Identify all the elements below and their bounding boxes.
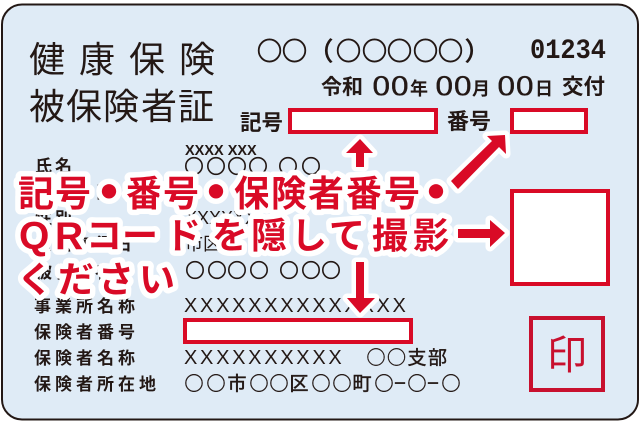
- branch name: ○○支部: [366, 343, 447, 370]
- name romaji: XXXX XXX: [185, 143, 257, 159]
- label: name: 氏名: [35, 157, 75, 176]
- issue date: 00: [372, 67, 409, 103]
- issue date: 交付: [562, 70, 605, 101]
- seal stamp: [531, 318, 603, 390]
- label: symbol: 記号: [240, 106, 283, 137]
- seal stamp: 印: [547, 323, 587, 381]
- label: birth date: 生年月日: [35, 182, 115, 202]
- insurer name value: XXXXXXXXXX: [184, 347, 344, 369]
- label: insurer number: 保険者番号: [34, 323, 139, 342]
- message line 2 QR letters: QR: [19, 215, 83, 258]
- red box: symbol: [290, 110, 436, 132]
- arrow: right to QR box: [458, 220, 505, 247]
- arrow: diagonal to number box: [451, 135, 506, 189]
- message line 2: コードを隠して撮影: [86, 207, 449, 259]
- message line 1 text: 記号番号保険者番号: [18, 165, 420, 217]
- red box: QR code: [512, 191, 608, 284]
- issue date: [321, 67, 605, 103]
- label: sex: 性別: [35, 209, 75, 228]
- red box: insurer number: [185, 320, 411, 342]
- office value: XXXXXXXXXXXXXX: [184, 295, 409, 317]
- red box: number: [512, 110, 586, 132]
- address dashes: －－: [394, 373, 440, 392]
- label: acquisition date: 資格取得日: [35, 235, 135, 254]
- acquisition value: 市区町: [185, 234, 239, 254]
- address value: ○○市○○区○○町○○○: [184, 369, 461, 396]
- label: insurer address: 保険者所在地: [34, 375, 160, 394]
- warning message: [17, 149, 464, 303]
- label: number: 番号: [447, 104, 491, 136]
- title: insured person card: 被保険者証: [29, 86, 214, 127]
- arrow: down to insurer number box: [347, 262, 375, 313]
- label: insurer name: 保険者名称: [34, 349, 139, 368]
- birth date value: ○○: [183, 178, 222, 204]
- card number: 01234: [530, 36, 606, 67]
- insurer name placeholder: ○○（○○○○○）: [257, 32, 490, 68]
- label: office name: 事業所名称: [34, 297, 139, 316]
- issue date: 令和: [321, 71, 363, 101]
- issue date: 年: [410, 75, 428, 101]
- issue date: 日: [535, 75, 553, 101]
- issue date: 00: [497, 67, 534, 103]
- message line 3: ください: [17, 251, 175, 303]
- sex value: XXXXXX: [185, 208, 257, 228]
- guardian value: ○○○○○○○: [186, 256, 341, 283]
- arrow: up to symbol box: [346, 139, 373, 167]
- title: health insurance: 健康保険: [29, 39, 215, 80]
- name value: ○○○○○○: [184, 152, 321, 179]
- message line 1 dots: ・・・: [81, 149, 464, 230]
- issue date: 00: [435, 67, 472, 103]
- issue date: 月: [472, 75, 490, 101]
- label: guardian: 被保険者: [35, 263, 115, 282]
